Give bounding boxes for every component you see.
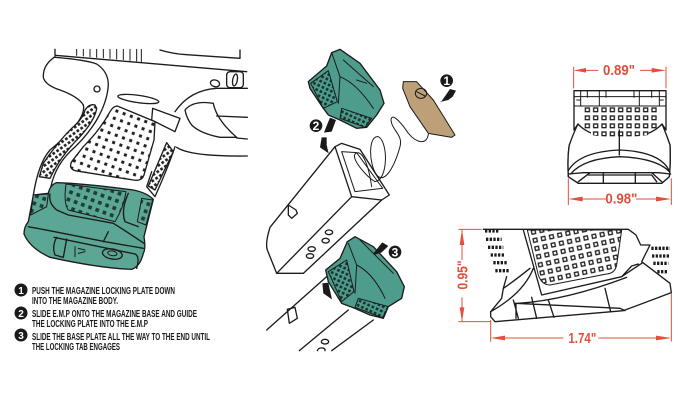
dimension: 0.95 inch: 0.95" — [455, 260, 472, 289]
step 2 text: 2 — [18, 309, 24, 320]
dimension: 1.74 inch — [491, 293, 671, 347]
teal extension installed — [326, 237, 404, 318]
dimension: 0.89 inch: 0.89" — [603, 62, 635, 79]
step 3 text: 3 — [18, 331, 24, 342]
badge: step 1: 1 — [443, 74, 450, 88]
step 1 text — [14, 284, 175, 307]
step 1 text: INTO THE MAGAZINE BODY. — [32, 295, 118, 307]
rear view drawing — [568, 91, 671, 183]
arrow: magazine direction — [320, 137, 329, 153]
step 3 text — [14, 328, 210, 353]
pistol frame outline — [33, 49, 247, 197]
step 3 text: SLIDE THE BASE PLATE ALL THE WAY TO THE END UNTIL — [32, 331, 210, 343]
arrow: push down — [322, 283, 332, 299]
arrow: plate insertion — [440, 89, 456, 102]
spring — [355, 117, 428, 187]
dimension: 1.74 inch: 1.74" — [568, 330, 596, 347]
step 1 text: 1 — [18, 286, 24, 297]
locking plate, tan — [403, 82, 455, 137]
badge: step 2 — [310, 119, 322, 133]
instructions list — [14, 284, 210, 353]
badge: step 1 — [440, 74, 453, 88]
rear view with width dimensions — [568, 62, 671, 208]
teal magazine extension — [24, 183, 153, 269]
step 2 text: THE LOCKING PLATE INTO THE E.M.P — [32, 318, 148, 330]
step 2 text: SLIDE E.M.P ONTO THE MAGAZINE BASE AND GUIDE — [32, 308, 197, 320]
badge: step 2: 2 — [313, 119, 320, 133]
step 2 text — [14, 306, 197, 330]
illustration: exploded assembly, upper part — [308, 49, 456, 187]
dimension: 0.95 inch — [455, 229, 491, 322]
step 1 text: PUSH THE MAGAZINE LOCKING PLATE DOWN — [32, 285, 175, 297]
side view drawing — [483, 229, 671, 322]
step 3 text: THE LOCKING TAB ENGAGES — [32, 341, 120, 353]
arrow: slide in — [373, 242, 388, 255]
grip stippling panel — [71, 106, 155, 180]
dimension: 0.89 inch — [574, 62, 666, 88]
magazine body lower — [267, 277, 373, 351]
magazine body upper — [267, 143, 389, 273]
arrow: extension slides down — [324, 118, 336, 133]
dimension: 0.98 inch — [568, 178, 671, 208]
illustration: assembled base plate on magazine — [267, 237, 404, 351]
dimension: 0.98 inch: 0.98" — [605, 191, 637, 208]
illustration: pistol grip with teal magazine extension — [24, 49, 247, 269]
side view with height and length dimensions — [455, 229, 671, 347]
badge: step 3: 3 — [392, 245, 399, 259]
teal extension part — [308, 49, 384, 128]
